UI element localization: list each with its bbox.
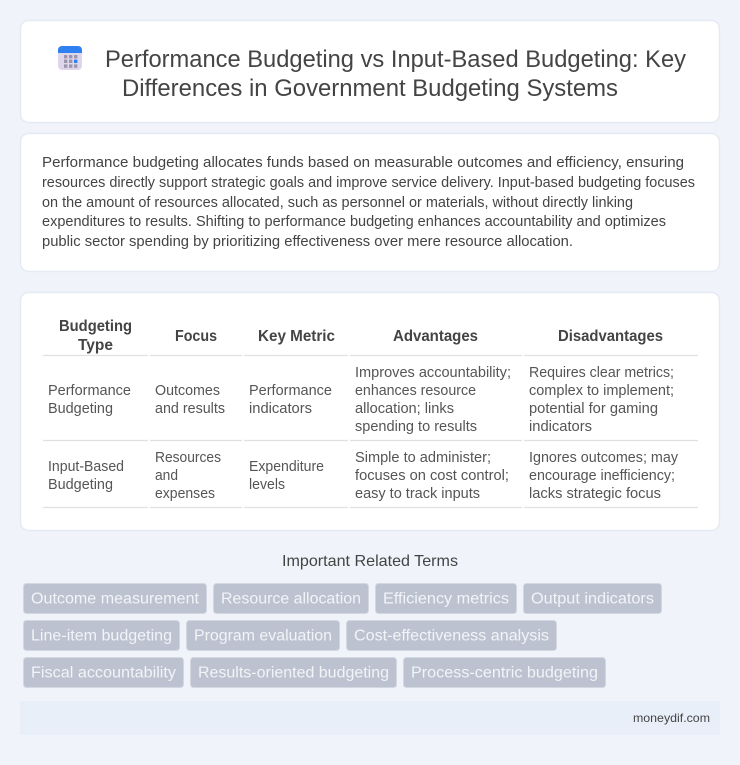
table row: performance budgeting: Requires clear metrics;: [529, 365, 674, 381]
table row: input-based budgeting: and: [155, 468, 178, 484]
text block: summary: [42, 155, 695, 250]
table header: Budgeting: [59, 318, 132, 335]
chips: related terms: Output indicators: [531, 590, 654, 608]
table header: [59, 318, 663, 354]
table row: performance budgeting: Improves accountability;: [355, 365, 511, 381]
footer: [20, 701, 720, 735]
table row: performance budgeting: Performance: [249, 383, 332, 399]
icon: calendar: [58, 46, 82, 70]
text block: summary: expenditures to results. Shifting to performance budgeting enhances accountability and optimizes: [42, 214, 666, 230]
table row: performance budgeting: Budgeting: [48, 401, 113, 417]
table row: input-based budgeting: Resources: [155, 450, 221, 466]
chips: related terms: Resource allocation: [221, 590, 361, 608]
chips: related terms: Results-oriented budgeting: [198, 664, 389, 682]
table row: input-based budgeting: lacks strategic focus: [529, 486, 661, 502]
chips: related terms: Cost-effectiveness analysis: [354, 628, 549, 644]
chips: related terms: Line-item budgeting: [31, 628, 172, 644]
table row: input-based budgeting: expenses: [155, 486, 215, 502]
panel: summary paragraph: [20, 134, 720, 272]
table row: performance budgeting: enhances resource: [355, 383, 476, 399]
chips: related terms: Process-centric budgeting: [411, 664, 598, 682]
table row: input-based budgeting: easy to track inputs: [355, 486, 480, 502]
chips: related terms: Program evaluation: [194, 628, 332, 644]
chips: related terms: Efficiency metrics: [383, 590, 509, 608]
table row: input-based budgeting: [48, 450, 679, 502]
text block: summary: Performance budgeting allocates funds based on measurable outcomes and efficiency, ensuring: [42, 155, 684, 171]
panel: title card: [20, 20, 720, 122]
table row: performance budgeting: Outcomes: [155, 383, 220, 399]
table row: performance budgeting: indicators: [249, 401, 312, 417]
title: Performance Budgeting vs Input-Based Budgeting: Key: [105, 46, 686, 73]
footer: moneydif.com: [633, 711, 710, 725]
title: Differences in Government Budgeting Systems: [122, 75, 618, 102]
table row: performance budgeting: complex to implement;: [529, 383, 674, 399]
table header: Key Metric: [258, 328, 335, 345]
table row: input-based budgeting: Simple to administer;: [355, 450, 491, 466]
table row: performance budgeting: [48, 365, 674, 435]
table row: performance budgeting: and results: [155, 401, 225, 417]
table header: Disadvantages: [558, 328, 663, 345]
table row: input-based budgeting: levels: [249, 477, 285, 493]
table row: performance budgeting: potential for gaming: [529, 401, 658, 417]
table row: input-based budgeting: Ignores outcomes; may: [529, 450, 679, 466]
chips: related terms: Outcome measurement: [31, 590, 200, 608]
table header: Type: [78, 337, 113, 354]
text block: summary: on the amount of resources allocated, such as personnel or materials, without directly linking: [42, 195, 633, 211]
table row: performance budgeting: spending to results: [355, 419, 477, 435]
table row: input-based budgeting: focuses on cost control;: [355, 468, 509, 484]
heading: important related terms: Important Related Terms: [282, 553, 458, 570]
table row: performance budgeting: Performance: [48, 383, 131, 399]
table row: input-based budgeting: Budgeting: [48, 477, 113, 493]
chips: related terms: Fiscal accountability: [31, 664, 176, 682]
table row: performance budgeting: allocation; links: [355, 401, 454, 417]
chips: related terms: [24, 584, 662, 688]
text block: summary: resources directly support strategic goals and improve service delivery. Input-based budgeting focuses: [42, 175, 695, 191]
table row: input-based budgeting: Expenditure: [249, 459, 324, 475]
table row: input-based budgeting: encourage inefficiency;: [529, 468, 675, 484]
table row: performance budgeting: indicators: [529, 419, 592, 435]
text block: summary: public sector spending by prioritizing effectiveness over mere resource allocation.: [42, 234, 573, 250]
panel: comparison table: [20, 292, 720, 530]
table header: Focus: [175, 328, 217, 345]
table header: Advantages: [393, 328, 478, 345]
title: [105, 46, 686, 102]
table row: input-based budgeting: Input-Based: [48, 459, 124, 475]
